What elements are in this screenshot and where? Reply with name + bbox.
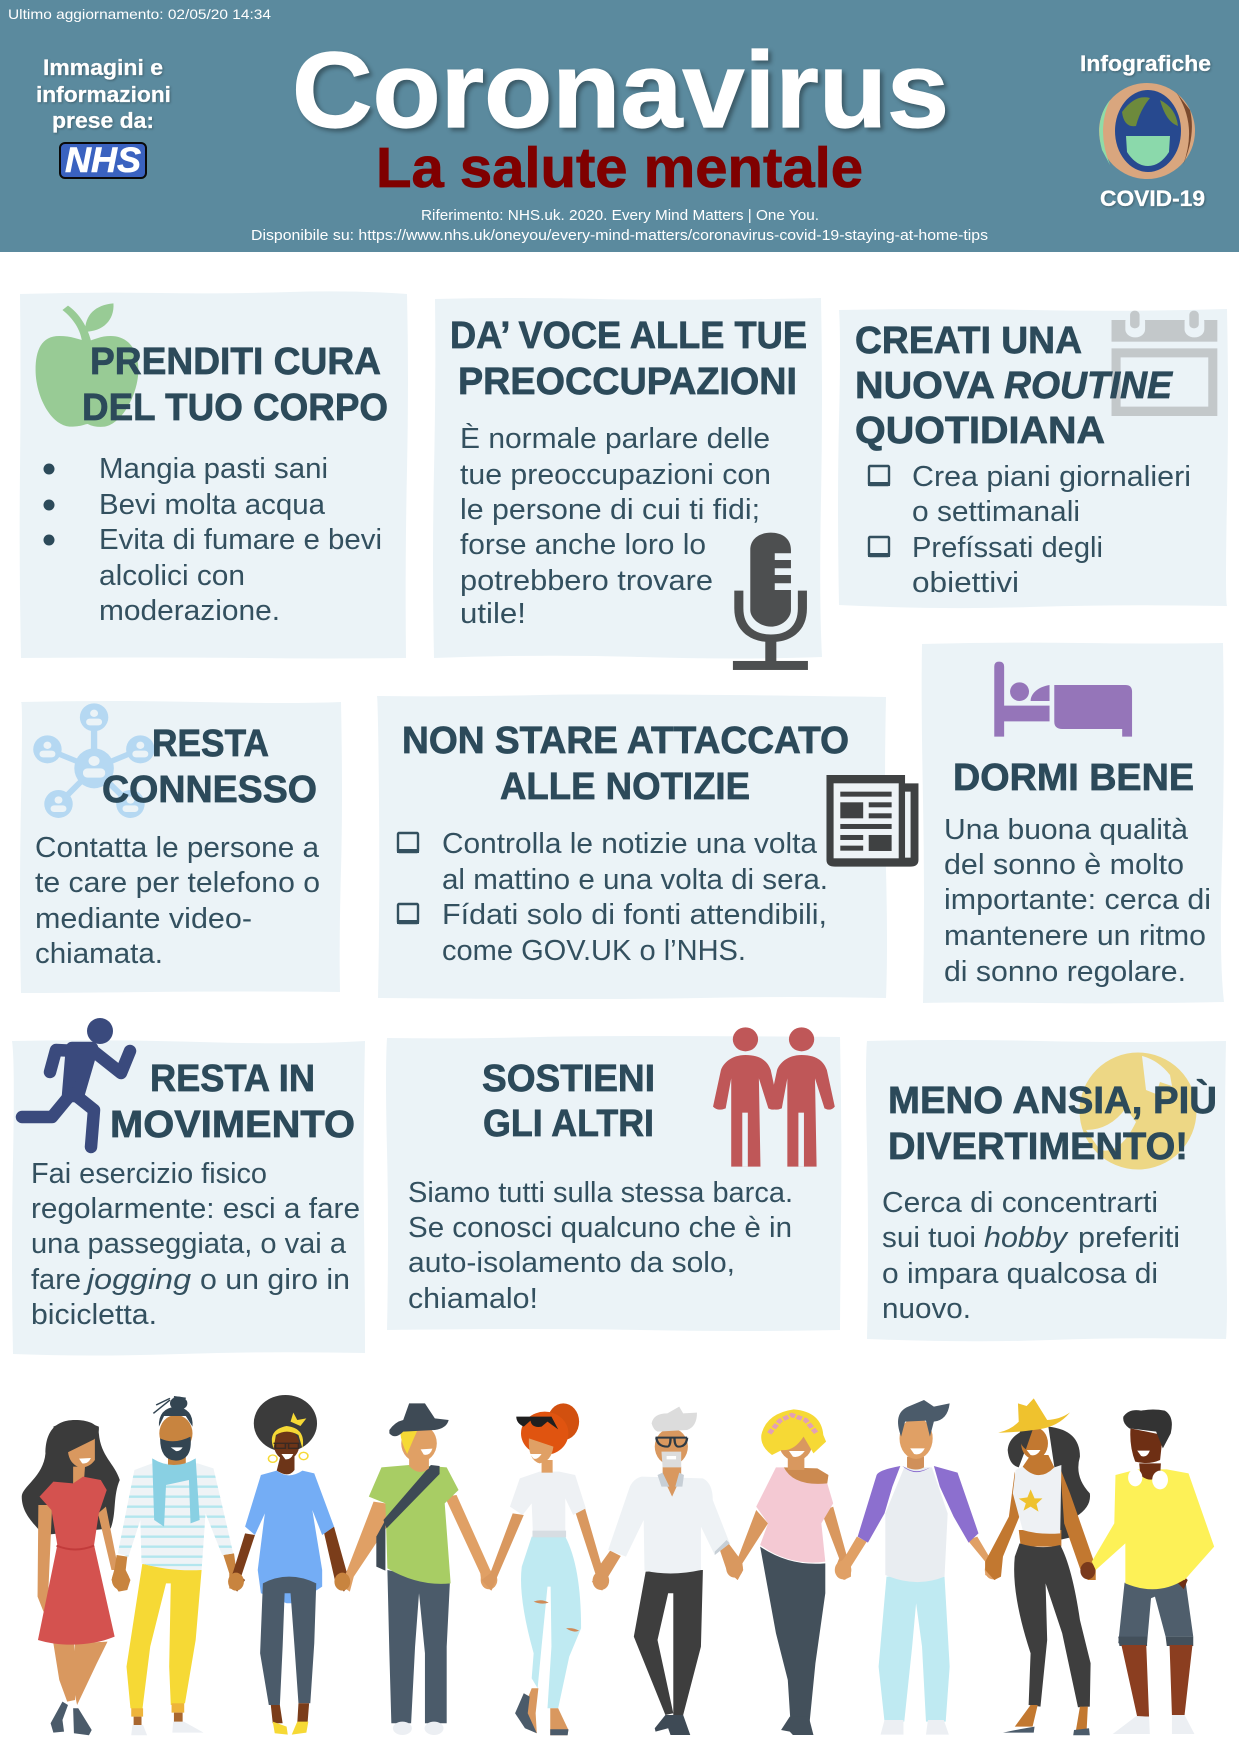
person: woman with afro and blue top — [228, 1395, 351, 1735]
person: man with purple sleeves — [835, 1400, 1001, 1735]
body text: auto-isolamento da solo, — [408, 1247, 735, 1279]
title: Coronavirus — [292, 29, 949, 150]
body text — [408, 1177, 793, 1315]
heading — [82, 341, 388, 429]
heading: DORMI BENE — [953, 757, 1194, 799]
body text: mantenere un ritmo — [944, 920, 1206, 952]
header banner — [0, 0, 1239, 252]
body text: o un giro in — [200, 1264, 350, 1296]
heading: PRENDITI CURA — [90, 341, 381, 383]
body text: te care per telefono o — [35, 867, 320, 899]
heading — [855, 320, 1174, 452]
heading: MENO ANSIA, PIÙ — [888, 1078, 1217, 1122]
body text — [460, 422, 771, 630]
body text: mediante video- — [35, 903, 252, 935]
panel: da' voce alle tue preoccupazioni — [433, 298, 822, 670]
checklist: Controlla le notizie una volta — [442, 828, 818, 860]
body text: regolarmente: esci a fare — [31, 1193, 360, 1225]
source credit text: prese da: — [52, 108, 154, 133]
panel: resta in movimento — [12, 1018, 365, 1356]
bullet list — [44, 453, 382, 627]
body text: utile! — [460, 598, 526, 630]
body text: bicicletta. — [31, 1299, 157, 1331]
illustration: people holding hands — [22, 1395, 1214, 1735]
panel: sostieni gli altri — [386, 1027, 841, 1331]
panel: meno ansia, più divertimento — [866, 1040, 1227, 1341]
body text: forse anche loro lo — [460, 529, 706, 561]
heading: NUOVA — [855, 365, 995, 407]
body text: una passeggiata, o vai a — [31, 1228, 347, 1260]
body text: preferiti — [1078, 1222, 1180, 1254]
body text — [944, 814, 1211, 988]
checklist: come GOV.UK o l’NHS. — [442, 935, 746, 967]
heading: PREOCCUPAZIONI — [458, 361, 797, 403]
source credit text: informazioni — [36, 82, 171, 107]
body text — [882, 1187, 1180, 1325]
person: woman with flower crown and pink top — [727, 1409, 851, 1735]
checklist: Fídati solo di fonti attendibili, — [442, 899, 827, 931]
heading — [102, 723, 317, 811]
body text: importante: cerca di — [944, 884, 1211, 916]
body text: le persone di cui ti fidi; — [460, 494, 760, 526]
checklist: obiettivi — [912, 567, 1019, 599]
reference text: Disponibile su: https://www.nhs.uk/oneyou/every-mind-matters/coronavirus-covid-19-staying-at-home-tips — [251, 228, 988, 244]
heading: RESTA — [152, 723, 269, 765]
body text: del sonno è molto — [944, 849, 1184, 881]
person: man with green t-shirt and hat — [334, 1403, 497, 1735]
body text: Se conosci qualcuno che è in — [408, 1212, 792, 1244]
body text: chiamata. — [35, 938, 163, 970]
checklist — [397, 828, 828, 967]
body text: hobby — [984, 1222, 1069, 1254]
icon: microphone — [733, 533, 808, 670]
checklist — [868, 461, 1191, 599]
bullet list: moderazione. — [99, 595, 280, 627]
heading: DA’ VOCE ALLE TUE — [450, 315, 807, 357]
body text: jogging — [83, 1264, 191, 1296]
icon: newspaper — [826, 775, 918, 867]
bullet list: Bevi molta acqua — [99, 489, 326, 521]
person: older man with glasses — [596, 1407, 743, 1735]
person: woman with red hair and white polo — [481, 1403, 609, 1735]
subtitle: La salute mentale — [376, 136, 863, 200]
source credit text — [36, 55, 171, 133]
panel: non stare attaccato alle notizie — [377, 694, 887, 999]
heading — [482, 1058, 655, 1145]
person: man with yellow sweater — [1092, 1409, 1214, 1734]
heading: CONNESSO — [102, 769, 317, 811]
heading: DEL TUO CORPO — [82, 387, 388, 429]
source credit text: Immagini e — [43, 55, 163, 80]
bullet list: Evita di fumare e bevi — [99, 524, 382, 556]
series label: Infografiche — [1080, 51, 1211, 76]
reference text: Riferimento: NHS.uk. 2020. Every Mind Matters | One You. — [421, 208, 819, 224]
body text: Siamo tutti sulla stessa barca. — [408, 1177, 793, 1209]
person: woman with cowboy hat — [985, 1398, 1096, 1735]
icon: NHS logo: NHS — [65, 141, 141, 180]
heading: GLI ALTRI — [483, 1103, 654, 1145]
panel: dormi bene — [922, 643, 1224, 1003]
icon: apple — [36, 303, 138, 427]
checklist: o settimanali — [912, 496, 1080, 528]
heading: RESTA IN — [150, 1058, 315, 1100]
body text: potrebbero trovare — [460, 565, 713, 597]
checklist: Prefíssati degli — [912, 532, 1103, 564]
heading: NON STARE ATTACCATO — [402, 720, 849, 762]
person: man with scarf and yellow trousers — [111, 1397, 242, 1735]
body text: Fai esercizio fisico — [31, 1158, 267, 1190]
icon: runner — [22, 1018, 130, 1147]
bullet list: Mangia pasti sani — [99, 453, 328, 485]
icon: people network — [33, 703, 155, 818]
body text: Una buona qualità — [944, 814, 1189, 846]
body text: tue preoccupazioni con — [460, 459, 771, 491]
last updated note: Ultimo aggiornamento: 02/05/20 14:34 — [8, 6, 271, 22]
body text: È normale parlare delle — [460, 422, 770, 455]
body text: fare — [31, 1264, 81, 1296]
heading: ROUTINE — [1004, 365, 1174, 407]
body text: sui tuoi — [882, 1222, 976, 1254]
heading: SOSTIENI — [482, 1058, 655, 1100]
heading — [402, 720, 849, 808]
icon: bed — [994, 662, 1132, 737]
body text — [31, 1158, 360, 1331]
body text: chiamalo! — [408, 1283, 538, 1315]
heading — [888, 1078, 1217, 1168]
body text: Cerca di concentrarti — [882, 1187, 1158, 1219]
panel: resta connesso — [20, 701, 342, 993]
icon: ball — [1080, 1052, 1196, 1170]
body text: Contatta le persone a — [35, 832, 320, 864]
heading: MOVIMENTO — [110, 1104, 355, 1146]
panel: prenditi cura del tuo corpo — [20, 291, 408, 658]
heading — [450, 315, 807, 403]
panel: creati una nuova routine quotidiana — [838, 309, 1228, 608]
heading: DIVERTIMENTO! — [888, 1126, 1188, 1168]
bullet list: alcolici con — [99, 560, 245, 592]
reference text — [251, 208, 988, 244]
checklist: al mattino e una volta di sera. — [442, 864, 828, 896]
icon: calendar — [1112, 311, 1217, 416]
heading: ALLE NOTIZIE — [500, 766, 750, 808]
heading: QUOTIDIANA — [855, 410, 1105, 452]
checklist: Crea piani giornalieri — [912, 461, 1191, 493]
body text — [35, 832, 320, 970]
heading — [110, 1058, 355, 1146]
body text: nuovo. — [882, 1293, 971, 1325]
person: woman in red dress — [22, 1420, 129, 1735]
heading: CREATI UNA — [855, 320, 1082, 362]
series label: COVID-19: COVID-19 — [1100, 186, 1205, 211]
icon: two people — [713, 1027, 835, 1167]
icon: masked globe — [1099, 83, 1195, 179]
body text: di sonno regolare. — [944, 956, 1186, 988]
body text: o impara qualcosa di — [882, 1258, 1158, 1290]
